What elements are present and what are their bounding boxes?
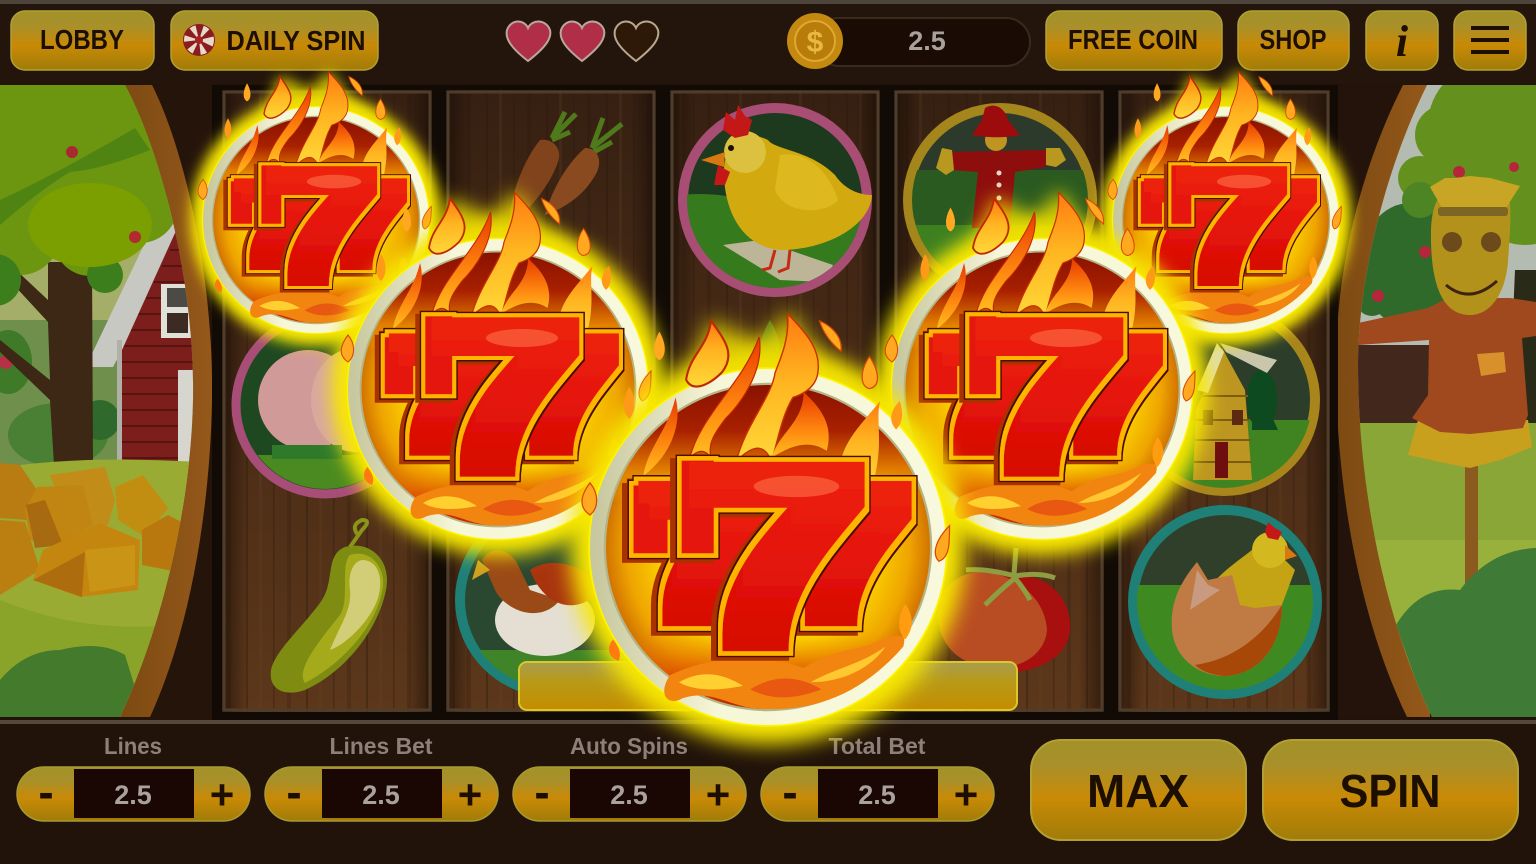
ground [0,460,200,720]
lines stepper: + [210,771,234,818]
triple seven: 7 [1143,159,1228,290]
max button [1031,740,1246,840]
reel 3 [670,90,880,712]
reel 5 [1118,90,1330,712]
triple seven: 7 [508,308,620,482]
lives hearts [507,21,658,61]
lobby button: LOBBY [40,24,124,55]
triple seven [233,137,408,314]
fire seven: top left [191,70,441,345]
scarecrow shirt [1358,298,1536,434]
symbol: leaf tip [760,320,780,378]
tree trunk [0,255,93,465]
triple seven: 7 [427,279,584,514]
heart 3 [615,21,658,61]
total bet stepper: + [954,771,978,818]
daily spin button [171,11,378,70]
info button: i [1396,17,1409,66]
triple seven: 7 [1172,137,1291,314]
menu button [1454,11,1526,70]
bushes behind [8,403,108,467]
right farm scene [1330,63,1536,723]
symbol: hut badge [1133,309,1315,500]
coin balance: 2.5 [908,26,946,56]
fire seven: middle right [876,190,1208,556]
icon: coin: $ [807,26,824,59]
fire seven: center [570,310,966,745]
symbol: pig badge [232,316,422,505]
triple seven [388,279,620,514]
bottom bush [1396,548,1536,720]
icon: coin [787,13,843,69]
grass [1350,423,1536,723]
triple seven: 7 [233,159,318,290]
reels [212,85,1338,720]
reel 4 [894,90,1104,712]
triple seven: 7 [779,451,913,657]
scarecrow post [1465,460,1478,585]
reel 1 [222,90,432,712]
triple seven [637,417,913,695]
auto spins stepper: Auto Spins [570,733,688,759]
coin balance [787,13,1030,69]
heart 2 [561,21,604,61]
wooden arch left [120,85,212,717]
straw skirt [1408,420,1532,468]
max button: MAX [1087,765,1189,817]
lines bet stepper: 2.5 [362,780,400,810]
lines bet stepper: - [286,766,302,818]
info button [1366,11,1438,70]
auto spins stepper: 2.5 [610,780,648,810]
symbol: scarecrow badge [905,106,1095,295]
symbol: tomato [938,548,1070,672]
fire seven: top right [1101,70,1351,345]
triple seven: 7 [262,137,381,314]
symbol: chick in egg badge [1133,510,1317,695]
total bet stepper: Total Bet [828,733,926,759]
symbol: pickle [271,520,387,693]
free coin button: FREE COIN [1068,24,1198,55]
lines bet stepper [265,733,498,821]
far trees [1398,85,1536,245]
triple seven [932,279,1164,514]
barn [92,197,194,510]
straw head [1431,190,1510,315]
small apple tree [0,330,32,394]
tree canopy [0,68,178,306]
hay bales [0,463,187,597]
total bet stepper [761,733,994,821]
triple seven: 7 [971,279,1128,514]
triple seven: 7 [388,308,500,482]
heart 1 [507,21,550,61]
total bet stepper: - [782,766,798,818]
spin button: SPIN [1340,765,1440,817]
auto spins stepper [513,733,746,821]
free coin button [1046,11,1222,70]
auto spins stepper: + [706,771,730,818]
fire seven: middle left [332,190,664,556]
triple seven: 7 [323,159,408,290]
shop button [1238,11,1349,70]
symbol: rooster badge [455,508,645,695]
shirt patch [1477,352,1506,376]
lobby button [11,11,154,70]
auto spins stepper: - [534,766,550,818]
dark hedge and water [1358,345,1429,425]
daily spin button: DAILY SPIN [226,25,366,56]
symbol: carrots [510,112,622,225]
lines stepper: - [38,766,54,818]
lines bet stepper: + [458,771,482,818]
lines stepper: 2.5 [114,780,152,810]
triple seven: 7 [1052,308,1164,482]
top bar [0,0,1536,84]
bottom control bar [0,720,1536,864]
wooden arch right [1336,85,1430,717]
triple seven: 7 [1233,159,1318,290]
face [1442,232,1462,252]
reel 2 [446,90,656,712]
reel symbols [232,105,1317,695]
icon: prize wheel [183,24,215,56]
front bush [0,646,134,717]
triple seven: 7 [637,451,771,657]
symbol: chicken badge [680,105,880,295]
lines stepper [17,733,250,821]
left farm scene [0,68,220,720]
triple seven [1143,137,1318,314]
yellow win banner [519,662,1017,710]
total bet stepper: 2.5 [858,780,896,810]
triple seven: 7 [932,308,1044,482]
triple seven: 7 [683,417,870,695]
spin button [1263,740,1518,840]
shop button: SHOP [1260,24,1326,55]
lines stepper: Lines [104,733,162,759]
lines bet stepper: Lines Bet [330,733,433,759]
